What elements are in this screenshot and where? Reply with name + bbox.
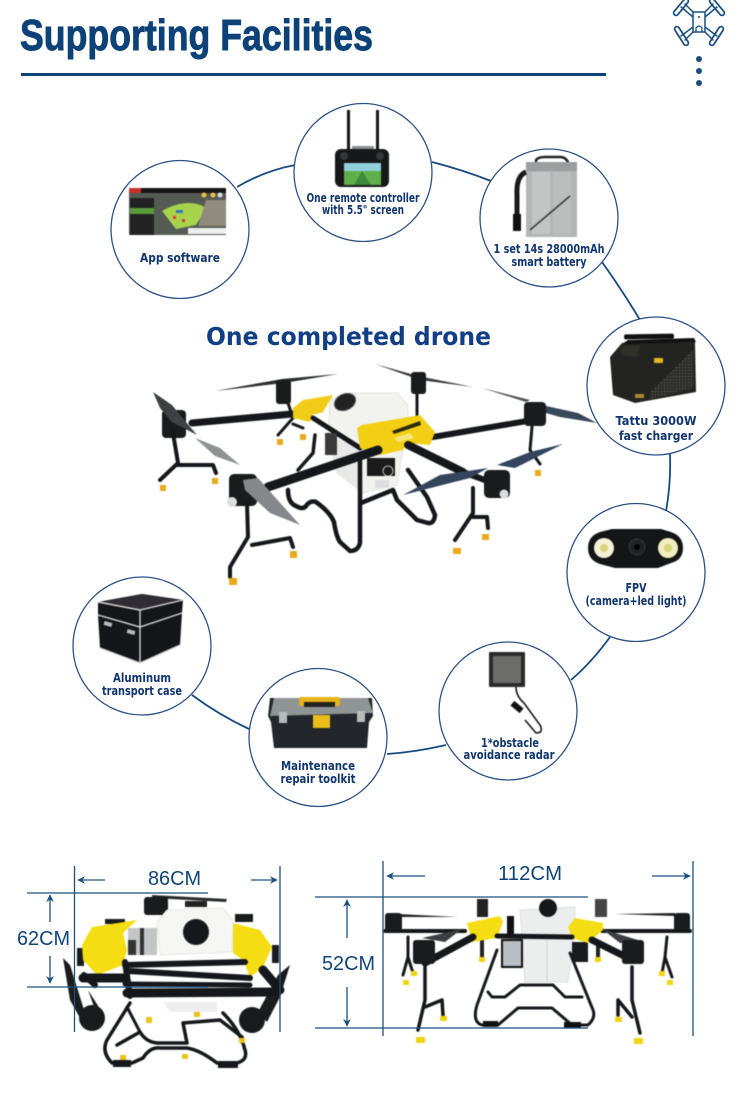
- label: battery: 1 set 14s 28000mAh: [494, 242, 604, 256]
- icon: app screenshot: [129, 188, 226, 235]
- label: aluminum case: Aluminum: [113, 671, 171, 685]
- label: radar: 1*obstacle: [481, 736, 539, 750]
- back legs: [278, 393, 540, 464]
- skids: [105, 1003, 246, 1063]
- skids: [475, 950, 594, 1025]
- label: battery: [494, 242, 604, 269]
- dimension: 52CM: [315, 897, 588, 1028]
- title: Supporting Facilities: [20, 11, 373, 60]
- icon: smart battery: [513, 157, 577, 237]
- label: battery: smart battery: [512, 255, 587, 269]
- panel: battery: [480, 149, 618, 287]
- rear yellow cover: [293, 395, 333, 422]
- panel: app software: [111, 160, 249, 298]
- right blade: [403, 444, 563, 495]
- label: app software: App software: [140, 251, 220, 265]
- thin propellers: [398, 914, 458, 917]
- side frame and battery: [313, 418, 360, 448]
- battery box: [502, 940, 522, 967]
- label: charger: fast charger: [619, 429, 693, 443]
- front legs: [418, 967, 640, 1033]
- icon: toolbox: [268, 697, 373, 748]
- blades: [63, 958, 85, 1018]
- front arms: [268, 450, 378, 487]
- dimension: 112CM: 112CM: [498, 863, 562, 885]
- panel: FPV: [567, 504, 705, 642]
- lower tank: [163, 1002, 217, 1012]
- dimension: 86CM: 86CM: [148, 868, 201, 890]
- nozzles: [403, 957, 673, 1044]
- pump: [507, 916, 514, 934]
- diagonal arms: [425, 937, 473, 963]
- heading: one completed drone: One completed drone: [206, 322, 491, 351]
- label: FPV: FPV: [626, 581, 647, 595]
- folded drone front view: [63, 895, 290, 1068]
- filler cap: [332, 390, 358, 414]
- icon: remote controller: [335, 110, 389, 187]
- front legs: [160, 433, 488, 577]
- icon: charger: [610, 334, 696, 403]
- icon: FPV camera: [588, 529, 683, 568]
- icon: radar: [489, 652, 541, 733]
- icon: transport case: [98, 594, 183, 663]
- dimension: 52CM: 52CM: [322, 953, 375, 975]
- front yellow cover: [357, 415, 435, 455]
- panel: charger: [587, 317, 725, 455]
- label: charger: [616, 414, 696, 443]
- rear arms: [192, 414, 292, 423]
- tank: [520, 907, 575, 982]
- left blades: [153, 392, 197, 435]
- dimension: 86CM: [74, 866, 280, 1032]
- nozzles: [120, 1012, 245, 1060]
- side-view drone: [385, 899, 690, 1044]
- yellow covers: [467, 916, 503, 942]
- panel: radar: [439, 642, 577, 780]
- nozzles: [160, 434, 541, 585]
- dimension: 112CM: [383, 861, 693, 1036]
- dimension: 62CM: 62CM: [17, 928, 70, 950]
- label: toolkit: [280, 759, 356, 786]
- label: toolkit: repair toolkit: [280, 772, 356, 786]
- label: aluminum case: transport case: [102, 684, 182, 698]
- label: aluminum case: [102, 671, 182, 698]
- panel: toolkit: [249, 668, 387, 806]
- dimension: 62CM: [17, 893, 208, 987]
- label: remote controller: One remote controller: [306, 191, 420, 205]
- label: toolkit: Maintenance: [281, 759, 355, 773]
- icon: drone with dots: [676, 1, 722, 86]
- label: remote controller: with 5.5" screen: [322, 203, 404, 217]
- thin propellers: [215, 374, 338, 391]
- vertical blocks: [477, 899, 488, 917]
- motors: [162, 372, 546, 506]
- dark blades: [422, 929, 462, 942]
- top propeller: [152, 895, 227, 902]
- label: charger: Tattu 3000W: [616, 414, 696, 428]
- tank: [328, 393, 408, 493]
- yellow covers: [82, 920, 137, 975]
- panel: aluminum case: [73, 577, 211, 715]
- battery box: [128, 928, 157, 955]
- rear legs: [403, 937, 672, 977]
- side motors: [77, 948, 84, 966]
- main drone illustration: [153, 364, 597, 585]
- motor lights: [227, 497, 237, 507]
- tank: [157, 908, 233, 955]
- crossbar: [497, 936, 572, 937]
- label: radar: avoidance radar: [464, 748, 555, 762]
- outer arms: [385, 929, 465, 933]
- label: radar: [464, 736, 555, 762]
- side bumpers: [235, 914, 253, 922]
- label: FPV: [586, 581, 686, 608]
- connector lines: [192, 162, 670, 754]
- folded motors: [79, 1005, 105, 1031]
- title underline: [21, 73, 606, 76]
- label: FPV: (camera+led light): [586, 594, 686, 608]
- camera block: [367, 458, 395, 476]
- skids: [288, 457, 360, 551]
- label: remote controller: [306, 191, 420, 217]
- frame bars: [83, 962, 280, 996]
- panel: remote controller: [294, 104, 432, 242]
- motors: [385, 913, 690, 964]
